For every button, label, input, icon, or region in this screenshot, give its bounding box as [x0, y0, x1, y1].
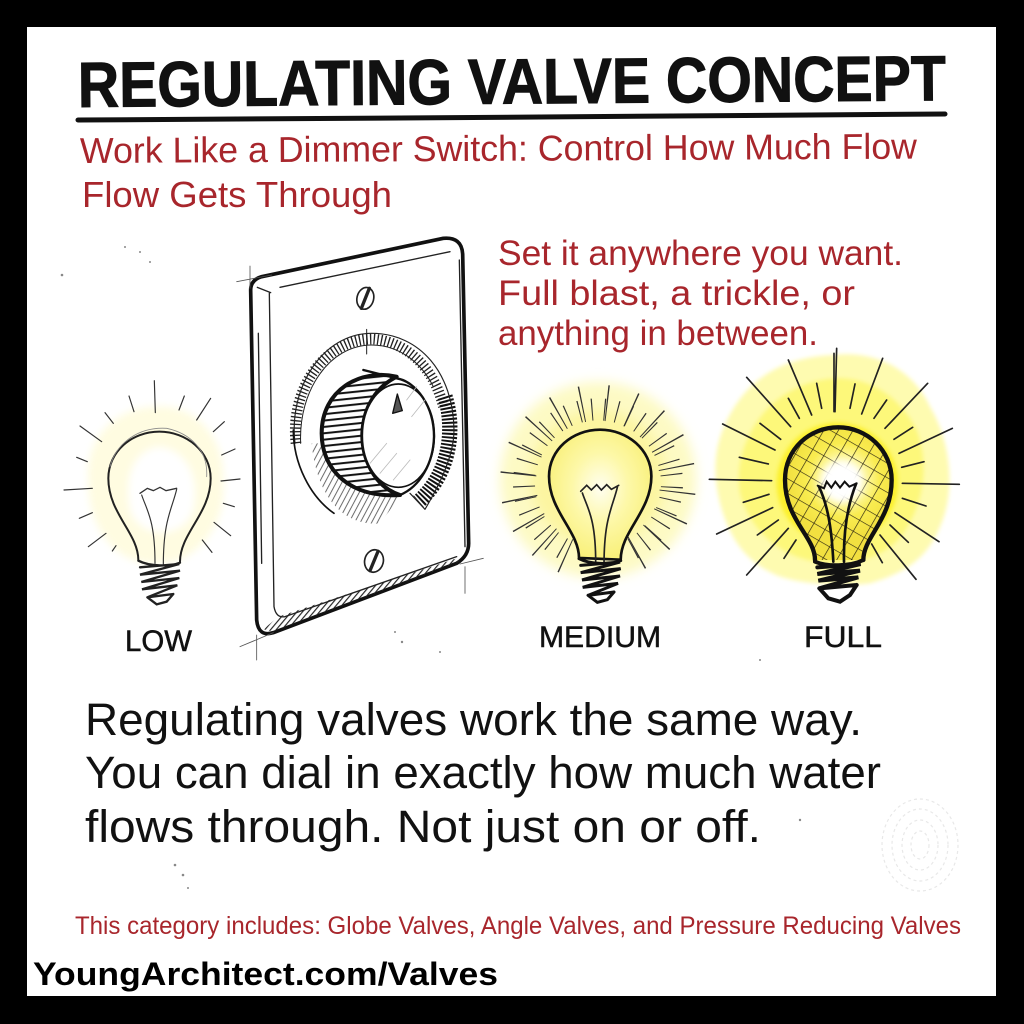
icon: medium bulb with glow: [500, 382, 696, 602]
icon: full bulb with strong glow: [709, 348, 959, 602]
subtitle: [80, 126, 918, 215]
plate bevel lines: [257, 252, 465, 617]
body text: flows through. Not just on or off.: [85, 801, 761, 852]
icon: low bulb with faint glow: [64, 381, 240, 604]
body text: [85, 694, 881, 852]
smudge: fingerprint: [882, 799, 958, 891]
bottom bevel hatching: [263, 558, 461, 632]
short rays: [524, 409, 672, 551]
callout: set it anywhere: Full blast, a trickle, or: [498, 274, 855, 313]
callout: set it anywhere: [498, 234, 903, 353]
callout: set it anywhere: anything in between.: [498, 314, 818, 353]
callout: set it anywhere: Set it anywhere you want.: [498, 234, 903, 273]
label: medium: MEDIUM: [539, 621, 661, 654]
knob face: [362, 384, 434, 487]
lower screw: [362, 548, 386, 574]
knob body: [322, 375, 400, 495]
pointer: [393, 394, 402, 413]
source url: YoungArchitect.com/Valves: [33, 956, 498, 992]
body text: You can dial in exactly how much water: [85, 747, 881, 798]
dial scale ring: [293, 329, 454, 513]
paper specks: [61, 246, 801, 889]
footer note: This category includes: Globe Valves, Angle Valves, and Pressure Reducing Valves: [75, 912, 961, 940]
icon: dimmer switch: [237, 238, 483, 660]
upper screw: [355, 286, 376, 311]
long rays: [518, 403, 678, 556]
subtitle: Work Like a Dimmer Switch: Control How Much Flow: [80, 126, 918, 171]
construction lines: [237, 266, 483, 660]
label: full: FULL: [804, 621, 882, 654]
title: REGULATING VALVE CONCEPT: [78, 42, 946, 121]
switch plate: [251, 238, 469, 634]
label: low: LOW: [125, 625, 193, 658]
subtitle: Flow Gets Through: [82, 174, 392, 215]
body text: Regulating valves work the same way.: [85, 694, 862, 745]
knob shadow hatching: [312, 443, 400, 524]
